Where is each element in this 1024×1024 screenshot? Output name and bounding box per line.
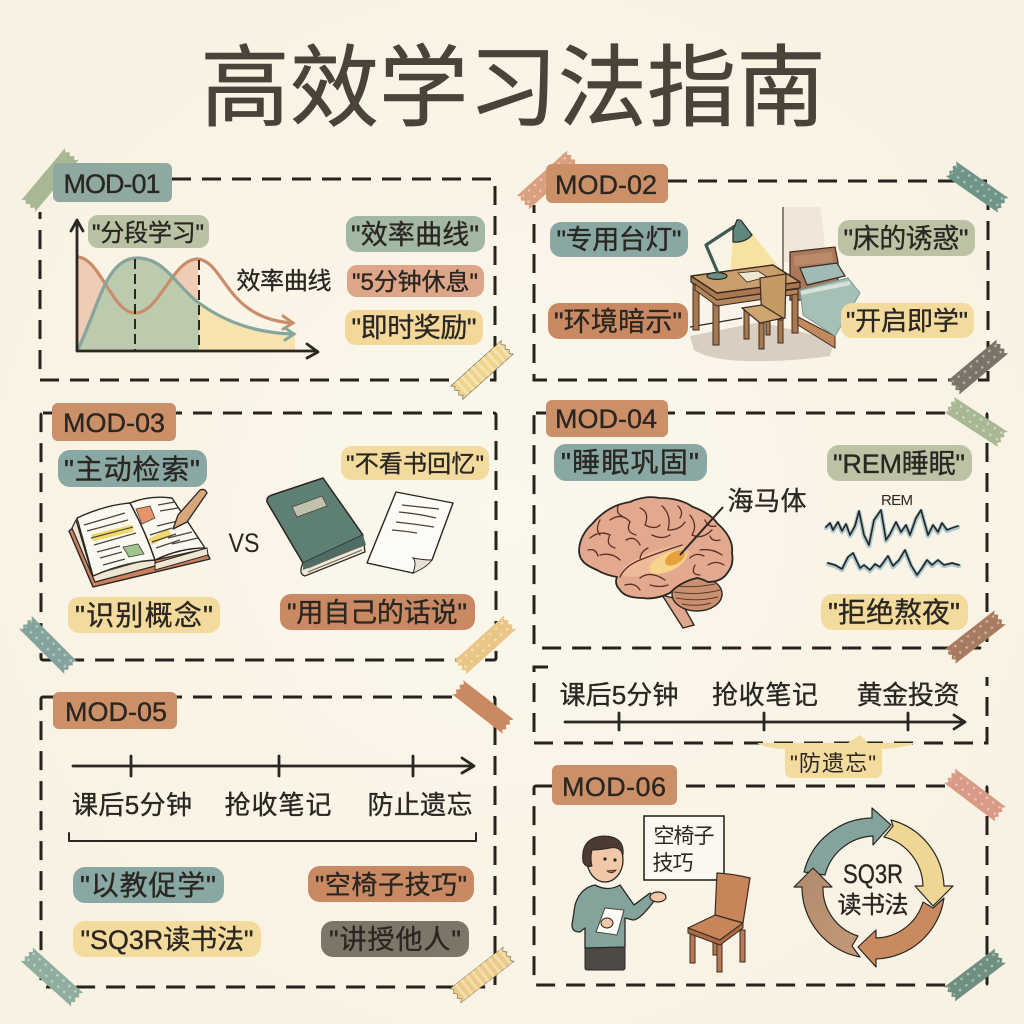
tag: MOD-02: MOD-02 bbox=[555, 170, 657, 200]
tag: active retrieval: "主动检索" bbox=[64, 454, 200, 485]
tag: instant reward: "即时奖励" bbox=[352, 313, 476, 343]
title: 高效学习法指南 bbox=[200, 38, 826, 138]
callout: prevent forgetting: "防遗忘" bbox=[790, 751, 876, 776]
icon: open book with pen bbox=[69, 489, 210, 587]
tag: dedicated lamp: "专用台灯" bbox=[556, 225, 682, 255]
tag: empty chair technique: "空椅子技巧" bbox=[315, 870, 467, 900]
callout: hippocampus pointer line bbox=[680, 507, 723, 555]
tag: REM sleep: "REM睡眠" bbox=[833, 449, 965, 479]
panel: golden investment timeline bbox=[534, 667, 987, 778]
text: rescue notes: 抢收笔记 bbox=[712, 680, 818, 710]
text: after class 5 minutes: 课后5分钟 bbox=[560, 680, 678, 710]
text: golden investment: 黄金投资 bbox=[856, 680, 960, 710]
tape: panel 2 top right teal bbox=[946, 161, 1008, 213]
text: REM label: REM bbox=[881, 492, 913, 509]
icon: SQ3R cycle arrows bbox=[794, 808, 953, 967]
tape: panel 3 bottom right amber bbox=[454, 616, 516, 674]
tag: sleep consolidation: "睡眠巩固" bbox=[561, 447, 699, 478]
panel: MOD-02 environment cue bbox=[517, 151, 988, 380]
tag: MOD-02 bbox=[546, 164, 668, 203]
tape: top left sage bbox=[21, 148, 79, 212]
tape: panel 6 bottom right green bbox=[944, 949, 1006, 1001]
tag: teach to learn: "以教促学" bbox=[80, 870, 216, 901]
tag: MOD-03 bbox=[52, 403, 176, 441]
text: hippocampus label: 海马体 bbox=[728, 486, 806, 516]
text: after class 5 minutes: 课后5分钟 bbox=[72, 790, 192, 820]
panel: MOD-03 active recall bbox=[41, 403, 496, 660]
tape: panel 1 bottom right yellow bbox=[451, 341, 513, 399]
tag: teach others: "讲授他人" bbox=[329, 925, 461, 955]
icon: teacher person bbox=[572, 836, 666, 970]
illustration: desk, lamp and bed bbox=[690, 207, 860, 361]
tape: panel 6 top right rose bbox=[944, 769, 1006, 821]
tape: panel 2 bottom right grey bbox=[948, 340, 1008, 394]
tag: say in own words: "用自己的话说" bbox=[287, 598, 467, 628]
tape: panel 2 top left coral bbox=[517, 151, 579, 209]
chart: REM brain waves bbox=[826, 510, 959, 576]
tape: panel 5 bottom right yellow bbox=[450, 947, 514, 1003]
tag: no all-nighters: "拒绝熬夜" bbox=[828, 597, 960, 628]
tag: MOD-05 bbox=[53, 692, 177, 729]
panel: MOD-05 teach to learn bbox=[41, 692, 495, 987]
tag: MOD-01 bbox=[53, 163, 172, 202]
tag: MOD-04: MOD-04 bbox=[555, 404, 657, 434]
tag: segmented study: "分段学习" bbox=[92, 220, 204, 247]
text: SQ3R center: SQ3R bbox=[843, 859, 903, 889]
tag: recall without book: "不看书回忆" bbox=[346, 451, 484, 478]
tag: start immediately: "开启即学" bbox=[846, 306, 968, 336]
icon: sign empty chair bbox=[644, 816, 724, 880]
panel: MOD-04 sleep consolidation bbox=[534, 400, 987, 648]
tag: MOD-01: MOD-01 bbox=[64, 169, 160, 199]
tag: MOD-06: MOD-06 bbox=[562, 772, 666, 802]
tag: MOD-04 bbox=[546, 400, 668, 437]
text: vs: VS bbox=[228, 528, 260, 558]
tape: panel 4 bottom right brown bbox=[944, 610, 1006, 664]
tag: efficiency curve: "效率曲线" bbox=[351, 220, 479, 250]
tape: panel 4 top right sage bbox=[944, 397, 1008, 447]
icon: sign empty chair: 技巧 bbox=[652, 852, 694, 875]
tag: SQ3R reading method: "SQ3R读书法" bbox=[80, 925, 254, 955]
tag: environment cue: "环境暗示" bbox=[554, 307, 682, 337]
panel: MOD-06 empty chair and SQ3R bbox=[534, 765, 987, 985]
arrow: timeline bbox=[73, 756, 474, 776]
icon: sign empty chair: 空椅子 bbox=[654, 825, 714, 848]
callout: prevent forgetting bbox=[757, 735, 915, 778]
tag: identify concepts: "识别概念" bbox=[75, 600, 213, 631]
icon: closed green book bbox=[267, 478, 366, 576]
tag: MOD-06 bbox=[552, 765, 677, 805]
efficiency curve chart bbox=[71, 220, 318, 358]
tag: MOD-05: MOD-05 bbox=[65, 697, 167, 727]
chart label: 效率曲线 bbox=[236, 268, 332, 295]
text: rescue notes: 抢收笔记 bbox=[224, 790, 332, 820]
icon: handwritten note bbox=[367, 492, 453, 573]
arrow: timeline bbox=[565, 713, 965, 730]
text: prevent forgetting: 防止遗忘 bbox=[368, 790, 472, 820]
tape: panel 3 bottom left teal bbox=[19, 616, 77, 674]
tag: MOD-03: MOD-03 bbox=[63, 408, 165, 438]
tape: panel 5 bottom left teal bbox=[21, 948, 83, 1006]
tag: 5 minute break: "5分钟休息" bbox=[352, 269, 478, 296]
panel: MOD-01 segmented study bbox=[21, 148, 495, 380]
tape: panel 5 top right terracotta bbox=[452, 680, 514, 734]
tag: temptation of bed: "床的诱惑" bbox=[844, 224, 968, 254]
icon: empty chair bbox=[688, 873, 750, 972]
text: reading method center: 读书法 bbox=[838, 892, 908, 919]
icon: brain with hippocampus bbox=[579, 497, 732, 628]
bracket bbox=[69, 833, 476, 841]
